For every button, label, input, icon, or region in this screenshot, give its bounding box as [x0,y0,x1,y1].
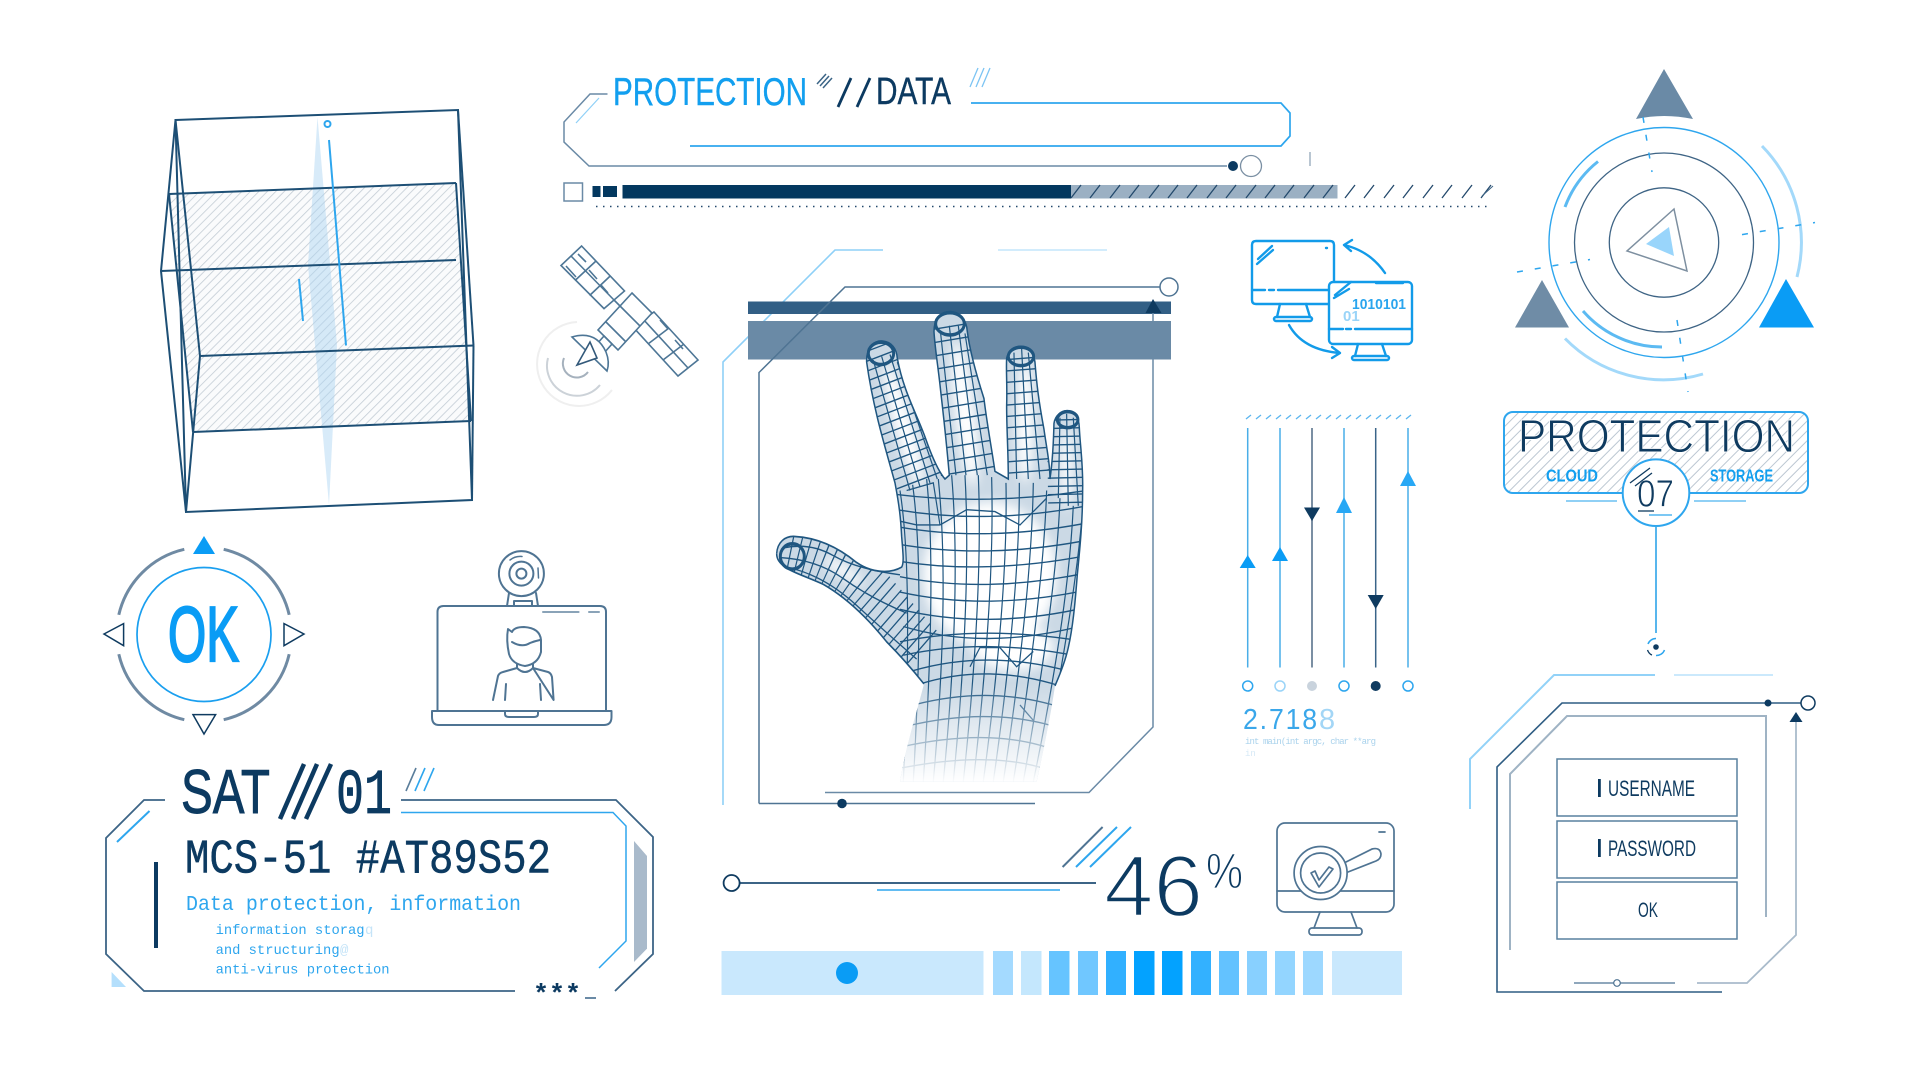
hatch mark [817,74,832,88]
finger nails [780,313,1078,569]
slider indicators [1243,681,1413,691]
wrist fade [900,686,1052,782]
connector target [1648,638,1664,656]
back monitor [1252,241,1334,321]
screen dashes [543,611,599,613]
panel title: 01: 01 [336,761,392,833]
panel text lines: information storag [216,923,365,939]
dial ring [137,568,271,702]
badge connector [1655,526,1657,633]
frame arrowhead [1146,299,1162,313]
panel prompt: *** [533,980,581,1010]
solar panel one [561,246,624,309]
progress bar solid [622,185,1071,198]
login panel [1470,675,1815,992]
readout value: 2.718 [1243,704,1319,736]
binary text: 01 [1343,308,1360,325]
login right frame [1697,722,1796,983]
laptop base [432,711,612,725]
slider column [1240,415,1416,759]
readout slashes [1063,827,1131,867]
slider handles [1240,471,1416,609]
wireframe hand [777,312,1087,784]
radar arcs [1565,146,1801,380]
cube blue markers [299,121,346,346]
slider lines [1248,428,1408,668]
radar pointer [1627,209,1687,271]
badge title: PROTECTION [1518,410,1795,462]
person [493,627,554,700]
panel inner blue frame [401,812,626,968]
frame dot [837,799,847,808]
level marker [836,962,858,984]
panel side bar [154,862,158,948]
dial up arrow [193,536,215,554]
login arrowhead [1790,712,1802,722]
front monitor [1329,282,1412,360]
login small slider [1574,980,1675,986]
cube edges [161,110,474,512]
icon: monitor with magnifier check [1277,823,1394,935]
badge side rules [1566,500,1746,502]
heading: protection: PROTECTION [613,71,807,114]
light slashes [970,68,990,87]
panel title slashes [280,764,331,819]
wireframe cube [161,110,474,512]
username field: USERNAME [1608,776,1695,801]
panel outer frame [106,800,653,991]
central hand panel [723,250,1178,808]
radar dashed crosshair [1517,117,1815,392]
readout slider line [724,875,1096,891]
panel text lines: and structuring [216,943,340,959]
header panel: protection data [564,68,1491,206]
sync arrow bottom [1289,325,1340,358]
login inner frame [1510,716,1766,950]
light blue outer frame [723,250,1107,805]
password field: PASSWORD [1608,836,1696,861]
login knob [1801,696,1815,710]
icon: synced monitors [1252,240,1412,360]
dotted rule [596,206,1490,208]
solar panel two [633,312,698,376]
badge number: 07 [1637,474,1674,516]
radar rings [1549,128,1779,358]
panel light slashes [406,768,416,791]
stray tick [1482,186,1493,196]
segmented level bar [722,951,1402,995]
badge label: cloud: CLOUD [1546,466,1598,486]
login dot [1764,700,1772,706]
readout value: 46 [1104,838,1203,935]
inner diagonal [576,98,599,123]
heading: data: DATA [876,71,952,113]
panel title: SAT: SAT [181,758,270,827]
radar target [1482,69,1815,392]
badge number [1623,459,1689,526]
level segments [993,951,1323,995]
grey frame [564,94,1227,166]
ok button [1557,882,1737,939]
laptop screen [438,606,606,711]
cube hatched face [169,183,471,432]
hand fill [777,312,1083,782]
slider hatch row [1246,415,1411,419]
satellite body [572,293,652,371]
icon: satellite [537,246,698,406]
magnifier [1294,846,1381,900]
mesh lines [780,312,1087,782]
panel diagonal [117,811,150,842]
grey frame [759,287,1160,804]
ok button: OK [1638,899,1658,922]
panel text lines: @ [340,943,349,959]
webcam [499,551,544,606]
slider knob [1228,156,1262,176]
protection badge [1504,410,1808,656]
readout percent: % [1206,843,1243,899]
checkbox [564,183,582,201]
frame knob [1160,278,1178,296]
thumb lower outline [777,554,924,684]
heading slashes [838,78,870,107]
level track [722,951,984,995]
binary text [1343,296,1406,325]
badge label: storage: STORAGE [1710,466,1773,486]
level end block [1332,951,1402,995]
blue frame [690,103,1290,146]
binary text: 1010101 [1352,296,1406,313]
panel prompt cursor [585,997,596,999]
hand highlights [821,340,1072,671]
hand outline [777,312,1083,686]
progress squares [592,186,617,197]
login dark frame [1497,703,1801,992]
dial direction arrows [104,624,304,734]
panel model code: MCS-51 #AT89S52 [185,834,551,888]
code line: int main(int argc, char **arg [1245,737,1376,747]
readout last digit: 8 [1319,704,1335,736]
dial arcs [119,549,289,720]
progress slashes [1071,185,1491,198]
panel subtitle: Data protection, information [186,894,521,917]
dial label: OK [168,590,239,678]
badge box [1504,412,1808,493]
monitor outline [1277,823,1394,935]
tick [1309,152,1311,166]
SAT info panel [106,758,653,1010]
radar corner triangles [1515,69,1814,328]
hand mesh [780,312,1087,784]
username field [1557,759,1737,816]
icon: laptop with webcam [432,551,612,725]
panel text lines [216,923,390,979]
percent readout [724,827,1243,935]
code line faded: in [1245,749,1256,759]
signal arcs [537,322,612,406]
panel grey tab [634,841,647,962]
progress bar remaining [1071,185,1338,198]
cube translucent diamond [308,117,337,505]
password field [1557,821,1737,878]
top bars [748,302,1171,360]
login light frame [1470,675,1773,809]
panel text lines: anti-virus protection [216,963,390,979]
panel text lines: q [365,923,373,939]
panel blue slashes [415,768,434,791]
sync arrow top [1344,240,1385,273]
panel corner triangle [112,972,126,987]
OK dial [104,536,304,734]
